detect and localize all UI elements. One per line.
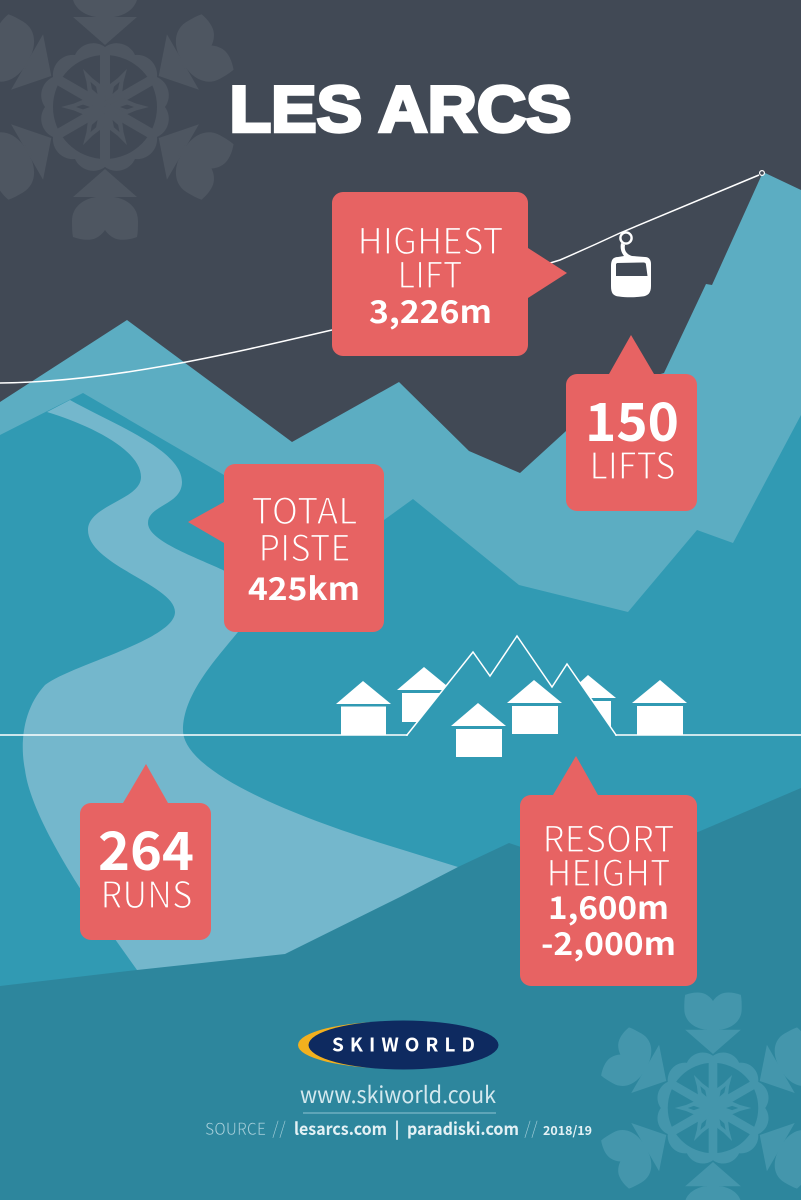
horizon and mountain outline bbox=[407, 636, 616, 760]
callout: lifts: LIFTS bbox=[590, 436, 676, 490]
source line: SOURCE bbox=[205, 1115, 266, 1140]
house front bbox=[451, 703, 506, 757]
callout: resort height bbox=[520, 756, 697, 986]
house back left bbox=[397, 667, 452, 722]
divider under url bbox=[303, 1112, 496, 1114]
website url: www.skiworld.couk bbox=[300, 1076, 496, 1110]
callout: highest lift: LIFT bbox=[398, 247, 462, 299]
callout: resort height: -2,000m bbox=[541, 919, 676, 964]
callout: lifts bbox=[566, 335, 697, 511]
callout: total piste: PISTE bbox=[258, 520, 350, 572]
callout: total piste: TOTAL bbox=[252, 483, 358, 535]
callout: lifts: 150 bbox=[585, 381, 679, 457]
resort illustration bbox=[0, 636, 801, 766]
logo: skiworld bbox=[298, 1020, 498, 1070]
source line: lesarcs.com bbox=[294, 1115, 387, 1140]
house right bbox=[632, 680, 687, 735]
house left bbox=[336, 681, 391, 736]
source line: | bbox=[394, 1115, 400, 1140]
source line: 2018/19 bbox=[543, 1120, 592, 1139]
callout: runs bbox=[80, 764, 211, 940]
callout: total piste: 425km bbox=[248, 564, 360, 609]
source line: // bbox=[272, 1115, 286, 1141]
logo: skiworld: SKIWORLD bbox=[332, 1030, 475, 1058]
callout: runs: 264 bbox=[98, 810, 194, 886]
icon: cable end point bbox=[760, 171, 764, 175]
icon: snowflake bottom right bbox=[599, 992, 801, 1200]
piste bbox=[23, 400, 458, 985]
house back right bbox=[562, 675, 616, 735]
bottom foreground mountain bbox=[0, 788, 801, 1200]
source line bbox=[205, 1115, 592, 1141]
callout: total piste bbox=[188, 464, 384, 632]
title: LES ARCS bbox=[230, 72, 572, 146]
icon: snowflake top left bbox=[0, 0, 237, 240]
callout: resort height: HEIGHT bbox=[546, 845, 670, 897]
source line: paradiski.com bbox=[407, 1115, 519, 1140]
cable line bbox=[0, 175, 759, 383]
callout: runs: RUNS bbox=[100, 865, 192, 919]
mid blue slopes bbox=[0, 393, 801, 1000]
callout: resort height: RESORT bbox=[542, 811, 674, 863]
icon: gondola bbox=[611, 232, 651, 297]
callout: resort height: 1,600m bbox=[548, 883, 669, 928]
light mountain range bbox=[0, 172, 801, 640]
house centre bbox=[507, 680, 562, 734]
callout: highest lift: 3,226m bbox=[369, 287, 492, 332]
callout: highest lift: HIGHEST bbox=[358, 213, 504, 265]
callout: highest lift bbox=[332, 192, 567, 356]
source line: // bbox=[524, 1115, 538, 1141]
